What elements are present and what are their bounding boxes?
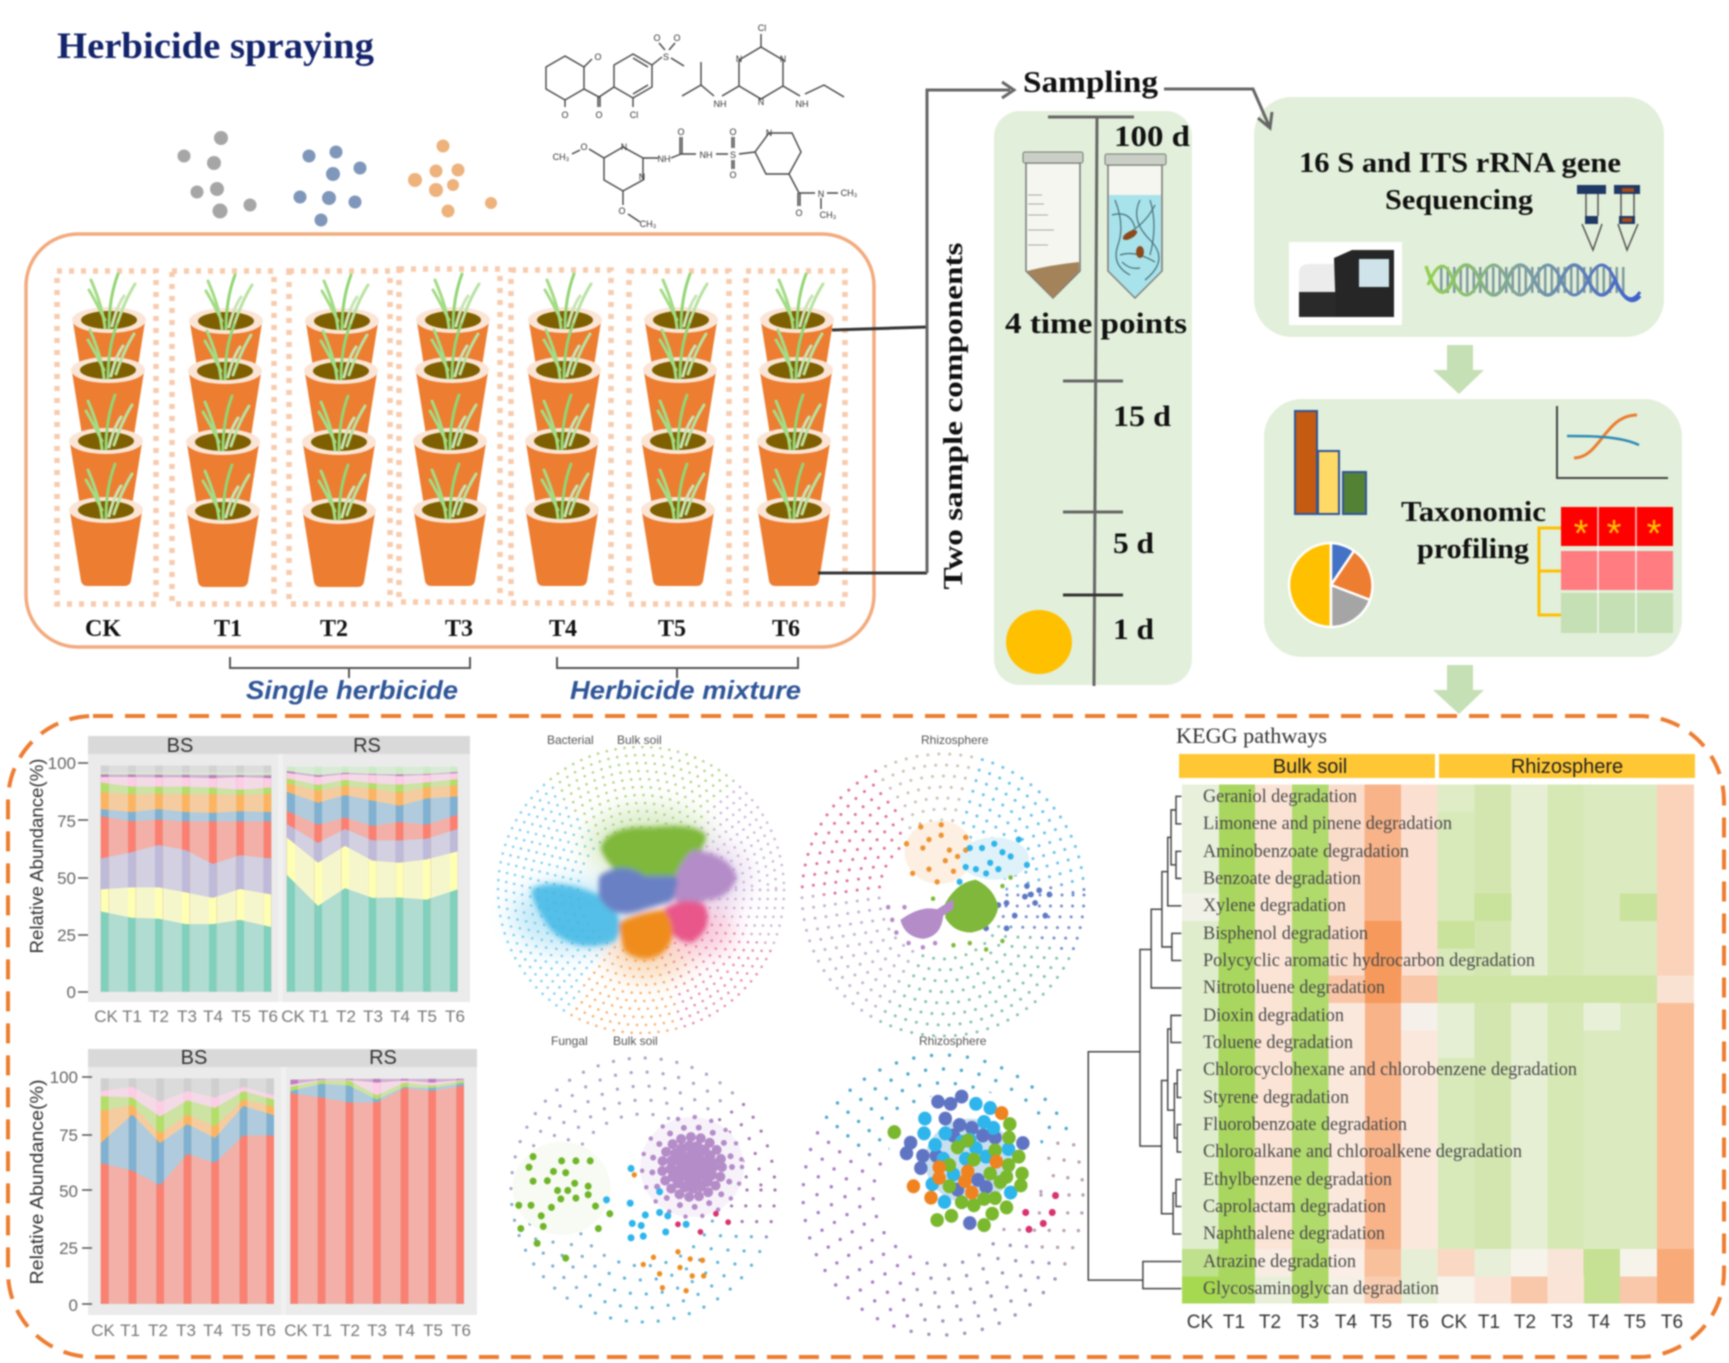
treatment labels [85,616,800,642]
dendrogram [1088,796,1181,1289]
dense modules halos [512,807,748,980]
x axis labels: T5 [231,1007,251,1026]
x axis labels: T4 [203,1321,223,1340]
panel: pots frame [26,234,874,647]
row labels: Fluorobenzoate degradation [1203,1114,1407,1135]
chemical structures [546,23,858,229]
label: 5 d: 5 d [1113,527,1154,560]
x axis labels: CK [281,1007,305,1026]
x axis labels: T6 [256,1321,276,1340]
outer nodes [803,1055,1083,1335]
arrow: profiling to results [1433,665,1484,714]
structure: nicosulfuron: N [818,189,824,199]
column group headers: Bulk soil [1273,756,1347,778]
row labels: Toluene degradation [1203,1032,1353,1053]
column labels: T5 [1624,1312,1646,1333]
icon: orange circle [1006,610,1072,674]
label: 4 time points: 4 time points [1005,307,1187,340]
label: sampling: Sampling [1023,64,1159,99]
y axis: 75 [57,812,76,831]
x axis labels: T6 [258,1007,278,1026]
x axis labels: CK [94,1007,118,1026]
x axis labels: T3 [177,1007,197,1026]
icon: orange droplets [408,140,497,218]
column labels: CK [1187,1312,1214,1333]
heading: sequencing: Sequencing [1385,185,1533,216]
structure: nicosulfuron: CH₃ [553,152,570,162]
structure: mesotrione [546,33,684,120]
structure: mesotrione: O [653,33,661,43]
structure: atrazine: N [780,54,786,64]
row labels: Caprolactam degradation [1203,1196,1386,1217]
heading: KEGG pathways [1176,723,1327,748]
network labels [551,1034,658,1048]
row labels: Glycosaminoglycan degradation [1203,1278,1439,1299]
treatment labels: T6 [772,616,800,642]
structure: mesotrione: S [663,52,669,62]
network: bacterial rhizosphere [802,733,1084,1036]
column labels: T5 [1370,1312,1392,1333]
y axis: 50 [59,1182,78,1201]
x axis labels: T5 [423,1321,443,1340]
x axis labels: T3 [176,1321,196,1340]
core hub nodes [888,1089,1056,1233]
column labels: T1 [1478,1312,1500,1333]
icon: significance heat grid: * [1647,513,1662,555]
structure: mesotrione: O [595,110,603,120]
network: fungal rhizosphere [803,1034,1083,1335]
panel: sampling timeline [994,111,1192,686]
icon: PCR tubes [1577,185,1640,250]
treatment labels: CK [85,616,121,642]
strip labels: BS [181,1047,207,1069]
x axis labels: T5 [417,1007,437,1026]
pots: T4 [525,274,602,586]
structure: nicosulfuron: N [639,172,645,182]
structure: nicosulfuron: CH₃ [841,188,858,198]
bracket: herbicide mixture [557,657,801,705]
row labels: Naphthalene degradation [1203,1223,1385,1244]
x axis labels: T6 [445,1007,465,1026]
panel: results dashed frame [8,716,1724,1357]
y axis: 100 [50,1068,78,1087]
structure: atrazine: N [736,54,742,64]
tube: root sample [1105,154,1166,298]
structure: mesotrione: Cl [630,110,638,120]
heatmap: KEGG pathways [1088,723,1695,1333]
row labels: Aminobenzoate degradation [1203,841,1409,862]
row labels [1203,786,1577,1299]
structure: atrazine: Cl [758,23,766,33]
label: 1 d: 1 d [1113,613,1154,646]
structure: nicosulfuron: NH [700,150,712,160]
structure: mesotrione: O [561,110,569,120]
pots: T1 [186,275,263,587]
bracket: herbicide mixture: Herbicide mixture [570,675,801,705]
icon: pie chart [1289,543,1372,627]
row labels: Polycyclic aromatic hydrocarbon degradation [1203,950,1535,971]
x axis labels: T1 [122,1007,142,1026]
treatment column dotted boxes [57,269,845,604]
structure: nicosulfuron: N [766,128,772,138]
icon: significance heat grid: * [1607,513,1622,555]
row labels: Bisphenol degradation [1203,923,1368,944]
x axis labels: T4 [390,1007,410,1026]
structure: nicosulfuron: O [580,142,588,152]
treatment labels: T5 [658,616,686,642]
network: bacterial bulk soil [498,733,784,1033]
structure: nicosulfuron: O [729,170,737,180]
structure: nicosulfuron: NH [658,154,670,164]
column labels: CK [1441,1312,1468,1333]
row labels: Xylene degradation [1203,895,1346,916]
label: taxonomic profiling: profiling [1417,534,1529,565]
column labels: T4 [1335,1312,1358,1333]
structure: atrazine: NH [714,99,726,109]
x axis labels: T3 [367,1321,387,1340]
chart: bacterial relative abundance [27,735,470,1026]
label: taxonomic profiling [1401,497,1546,565]
y axis: 0 [67,983,76,1002]
label: 100 d: 100 d [1114,120,1190,153]
pots: T3 [413,274,490,586]
strip labels: BS [167,735,193,757]
label: Rhizosphere [919,1034,987,1048]
icon: DNA helix [1426,265,1640,300]
icon: grey droplets [178,131,256,218]
column group headers: Rhizosphere [1511,756,1623,778]
arrow: sampling to sequencing [1164,89,1272,128]
structure: nicosulfuron: O [795,208,803,218]
column labels: T2 [1514,1312,1536,1333]
strip labels [167,735,381,757]
structure: mesotrione: O [673,33,681,43]
bracket: single herbicide [230,657,470,705]
row labels: Dioxin degradation [1203,1005,1344,1026]
arrow: sequencing to profiling [1433,345,1484,394]
treatment labels: T2 [320,616,348,642]
treatment labels: T4 [549,616,577,642]
x axis labels: T4 [395,1321,415,1340]
structure: atrazine: NH [796,99,808,109]
column labels: T6 [1407,1312,1429,1333]
structure: nicosulfuron: S [730,150,736,160]
row labels: Ethylbenzene degradation [1203,1169,1392,1190]
network labels: Fungal [551,1034,588,1048]
structure: nicosulfuron: CH₃ [820,210,837,220]
outer nodes [511,1058,775,1322]
lavender module [640,1117,744,1217]
structure: nicosulfuron: CH₃ [640,219,657,229]
structure: mesotrione: O [594,52,602,62]
title: Herbicide spraying [57,26,375,67]
stacked areas [101,1078,464,1304]
pots: CK [69,274,146,586]
icon: significance heat grid: * [1574,513,1589,555]
y axis: 50 [57,869,76,888]
x axis labels: T4 [203,1007,223,1026]
row labels: Geraniol degradation [1203,786,1357,807]
x axis labels [91,1321,471,1340]
icon: bar chart [1295,411,1366,514]
structure: atrazine [682,23,844,109]
column group headers [1179,754,1695,778]
column labels: T1 [1223,1312,1245,1333]
tick: 1 d [1063,594,1123,596]
label: taxonomic profiling: Taxonomic [1401,497,1546,528]
row labels: Chlorocyclohexane and chlorobenzene degradation [1203,1059,1577,1080]
label: 15 d: 15 d [1113,400,1171,433]
network labels: Bulk soil [613,1034,658,1048]
network: fungal bulk soil [511,1034,775,1322]
y axis: 75 [59,1126,78,1145]
heat cells [1182,785,1694,1303]
icon: blue droplets [294,146,366,226]
column labels [1187,1312,1683,1333]
chart: fungal relative abundance [27,1047,477,1340]
tube: soil sample [1023,152,1083,298]
structure: nicosulfuron: O [618,206,626,216]
x axis labels: T1 [312,1321,332,1340]
pots: T6 [757,274,834,586]
x axis labels: T3 [363,1007,383,1026]
treatment labels: T1 [214,616,242,642]
y axis: Relative Abundance(%) [27,1080,47,1284]
column labels: T3 [1297,1312,1319,1333]
strip labels: RS [369,1047,397,1069]
x axis labels: T6 [451,1321,471,1340]
label: two sample components: Two sample components [938,242,968,590]
strip labels [181,1047,397,1069]
x axis labels: T1 [120,1321,140,1340]
label: Rhizosphere [921,733,989,747]
y axis: 100 [48,754,76,773]
row labels: Chloroalkane and chloroalkene degradation [1203,1141,1522,1162]
network labels: Bacterial [547,733,594,747]
treatment labels: T3 [445,616,473,642]
pots: T2 [302,275,379,587]
dense modules [537,832,731,953]
coloured nodes [513,1142,728,1291]
x axis labels [94,1007,465,1026]
x axis labels: T2 [336,1007,356,1026]
column labels: T2 [1259,1312,1281,1333]
structure: nicosulfuron: O [677,127,685,137]
panel: taxonomic profiling [1264,399,1682,657]
y axis: 0 [69,1296,78,1315]
x axis labels: T2 [149,1007,169,1026]
icon: significance heat grid [1539,507,1673,633]
pots: T5 [641,274,718,586]
network labels: Bulk soil [617,733,662,747]
row labels: Limonene and pinene degradation [1203,813,1452,834]
row labels: Atrazine degradation [1203,1251,1356,1272]
arrow: pots to sampling [818,82,1014,573]
row labels: Benzoate degradation [1203,868,1361,889]
icon: sequencer [1289,242,1402,325]
heading: sequencing [1299,148,1621,216]
heading: sequencing: 16 S and ITS rRNA gene [1299,148,1621,179]
y axis: Relative Abundance(%) [27,759,47,953]
column labels: T4 [1588,1312,1611,1333]
y axis: 25 [59,1239,78,1258]
row labels: Styrene degradation [1203,1087,1349,1108]
strip labels: RS [353,735,381,757]
x axis labels: T2 [340,1321,360,1340]
y axis: 25 [57,926,76,945]
outer nodes [802,754,1084,1036]
modules [888,821,1049,949]
timeline axis [1048,117,1134,686]
bracket: single herbicide: Single herbicide [246,675,458,705]
structure: nicosulfuron: O [729,127,737,137]
x axis labels: CK [284,1321,308,1340]
x axis labels: T1 [309,1007,329,1026]
column labels: T6 [1661,1312,1683,1333]
herbicide droplets [178,131,497,226]
outer nodes [498,747,784,1033]
panel: sequencing [1254,97,1664,337]
x axis labels: CK [91,1321,115,1340]
structure: atrazine: N [758,97,764,107]
y axis [27,1068,92,1315]
x axis labels: T2 [148,1321,168,1340]
structure: nicosulfuron [553,127,858,229]
network labels [547,733,662,747]
column labels: T3 [1551,1312,1573,1333]
y axis [27,754,88,1002]
icon: line chart [1557,406,1668,478]
stacked areas [101,766,458,992]
x axis labels: T5 [231,1321,251,1340]
structure: nicosulfuron: N [621,142,627,152]
row labels: Nitrotoluene degradation [1203,977,1385,998]
